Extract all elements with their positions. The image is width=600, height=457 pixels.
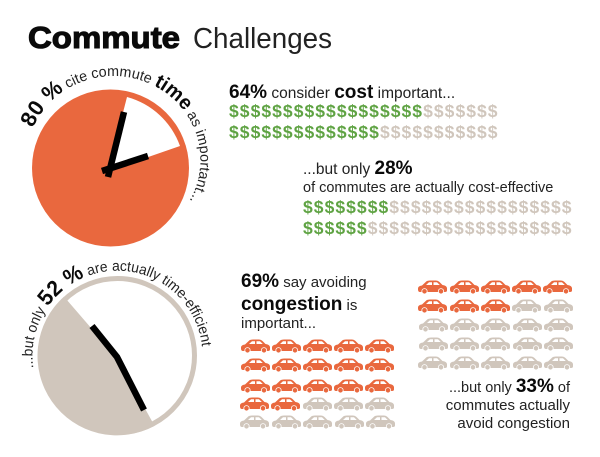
dollar rows: 28%: $$$$$$$$$$$$$$$$$$$$$$$$$ — [303, 218, 573, 238]
dollar rows: 28%: $$$$$$$$$$$$$$$$$$$$$$$$$ — [303, 197, 573, 217]
clock: 52% actually time-efficient — [38, 278, 194, 435]
clock: 80% cite commute time — [32, 90, 189, 246]
title: Challenges — [193, 23, 332, 55]
title — [28, 20, 332, 55]
dollar rows: 64%: $$$$$$$$$$$$$$$$$$$$$$$$$ — [229, 122, 499, 142]
car grid: 33% — [418, 280, 573, 370]
heading: 64% consider cost important: 64% consider cost important... — [229, 82, 455, 103]
text: 69% say avoiding congestion is important: congestion is — [241, 294, 357, 315]
text: 69% say avoiding congestion is important — [241, 271, 367, 332]
heading: but only 28%: ...but only 28% — [303, 158, 413, 179]
dollar rows: 28% — [303, 197, 573, 238]
text: 69% say avoiding congestion is important: 69% say avoiding — [241, 271, 367, 292]
curved label: 80% cite commute time as important: 80 % cite commute time as important... — [21, 68, 210, 200]
text: 69% say avoiding congestion is important: important... — [241, 315, 316, 332]
text: but only 33% of commutes actually avoid congestion: avoid congestion — [457, 415, 570, 432]
car grid: 69% — [240, 340, 395, 429]
text: but only 33% of commutes actually avoid congestion: commutes actually — [446, 397, 570, 414]
text: but only 33% of commutes actually avoid congestion — [446, 376, 571, 432]
dollar rows: 64%: $$$$$$$$$$$$$$$$$$$$$$$$$ — [229, 101, 499, 121]
dollar rows: 64% — [229, 101, 499, 142]
curved label: but only 52% are actually time-efficient: ...but only 52 % are actually time-efficient — [22, 262, 212, 367]
title: Commute — [28, 20, 180, 55]
text: of commutes are actually cost-effective: of commutes are actually cost-effective — [303, 180, 553, 196]
text: but only 33% of commutes actually avoid congestion: ...but only 33% of — [449, 376, 571, 397]
